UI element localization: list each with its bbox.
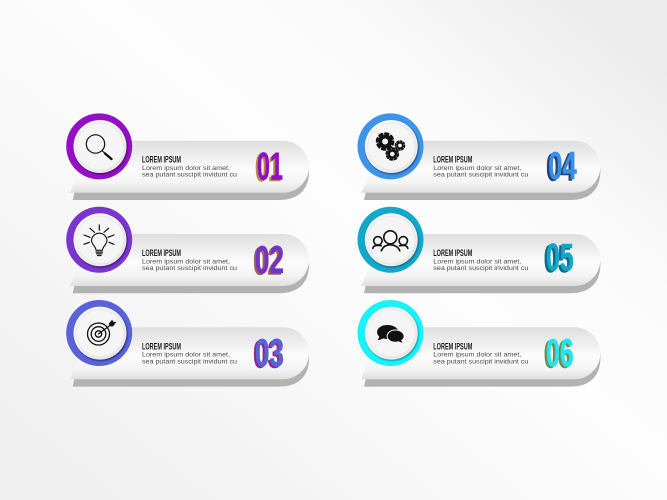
number 01 (255, 146, 283, 190)
panel: option 03 (66, 300, 309, 387)
icon: chat bubbles (377, 325, 404, 344)
number 02: 02 (255, 239, 284, 282)
number 04: 04 (548, 145, 577, 188)
panel: option 04 (358, 113, 600, 200)
ring 06 (358, 300, 424, 366)
disc 05 (365, 213, 419, 268)
text 02: sea putant suscipit invidunt cu (142, 265, 237, 272)
icon: gears (377, 134, 404, 160)
icon: magnifier (86, 135, 112, 159)
card shadow 05 (364, 260, 600, 293)
ring 05 (358, 207, 424, 273)
number 06: 06 (544, 334, 572, 377)
text 03: Lorem ipsum dolor sit amet, (142, 352, 230, 359)
disc 02 (74, 213, 128, 268)
number 05 (544, 236, 574, 281)
heading 02: LOREM IPSUM (142, 248, 181, 259)
heading 06: LOREM IPSUM (433, 341, 472, 352)
icon: light bulb (84, 225, 114, 256)
number 02 (253, 239, 284, 283)
text 04: Lorem ipsum dolor sit amet, (433, 165, 521, 172)
number 02: 02 (253, 240, 282, 283)
disc 04 (365, 120, 419, 174)
heading 03: LOREM IPSUM (142, 341, 181, 352)
text 03: sea putant suscipit invidunt cu (142, 358, 237, 365)
card shadow 06 (364, 354, 600, 387)
number 05: 05 (544, 238, 572, 281)
number 06: 06 (546, 332, 574, 375)
ring 02 (66, 207, 132, 273)
number 03: 03 (253, 334, 282, 377)
text 01: Lorem ipsum dolor sit amet, (142, 165, 230, 172)
ring 01 (66, 113, 132, 179)
heading 01: LOREM IPSUM (142, 155, 181, 166)
heading 05: LOREM IPSUM (433, 248, 472, 259)
card shadow 02 (73, 260, 309, 293)
text 06: Lorem ipsum dolor sit amet, (433, 352, 521, 359)
heading 04: LOREM IPSUM (433, 155, 472, 166)
disc 01 (74, 120, 128, 174)
text 06: sea putant suscipit invidunt cu (433, 358, 529, 365)
card 05 (361, 234, 600, 286)
ring 03 (66, 300, 132, 366)
number 01: 01 (255, 147, 281, 190)
card 03 (70, 327, 309, 379)
card shadow 01 (73, 167, 309, 200)
ring 04 (358, 113, 424, 179)
text 02: Lorem ipsum dolor sit amet, (142, 258, 230, 265)
icon: target with arrow (88, 320, 116, 345)
card shadow 04 (364, 167, 600, 200)
disc 06 (365, 307, 419, 361)
panel: option 05 (358, 207, 600, 293)
text 04: sea putant suscipit invidunt cu (433, 172, 529, 179)
number 03: 03 (255, 332, 284, 375)
panel: option 02 (66, 207, 309, 293)
number 03 (253, 332, 284, 377)
text 05: sea putant suscipit invidunt cu (433, 265, 529, 272)
card 02 (70, 234, 309, 286)
number 06 (544, 332, 574, 377)
card 01 (70, 141, 309, 193)
card 04 (361, 141, 600, 193)
number 04 (546, 145, 577, 190)
text 05: Lorem ipsum dolor sit amet, (433, 258, 521, 265)
number 05: 05 (546, 236, 574, 279)
text 01: sea putant suscipit invidunt cu (142, 172, 237, 179)
panel: option 06 (358, 300, 600, 387)
card shadow 03 (73, 354, 309, 387)
number 01: 01 (257, 146, 283, 188)
disc 03 (74, 307, 128, 361)
panel: option 01 (66, 113, 309, 200)
number 04: 04 (546, 146, 575, 190)
card 06 (361, 327, 600, 379)
icon: group of people (373, 231, 408, 251)
